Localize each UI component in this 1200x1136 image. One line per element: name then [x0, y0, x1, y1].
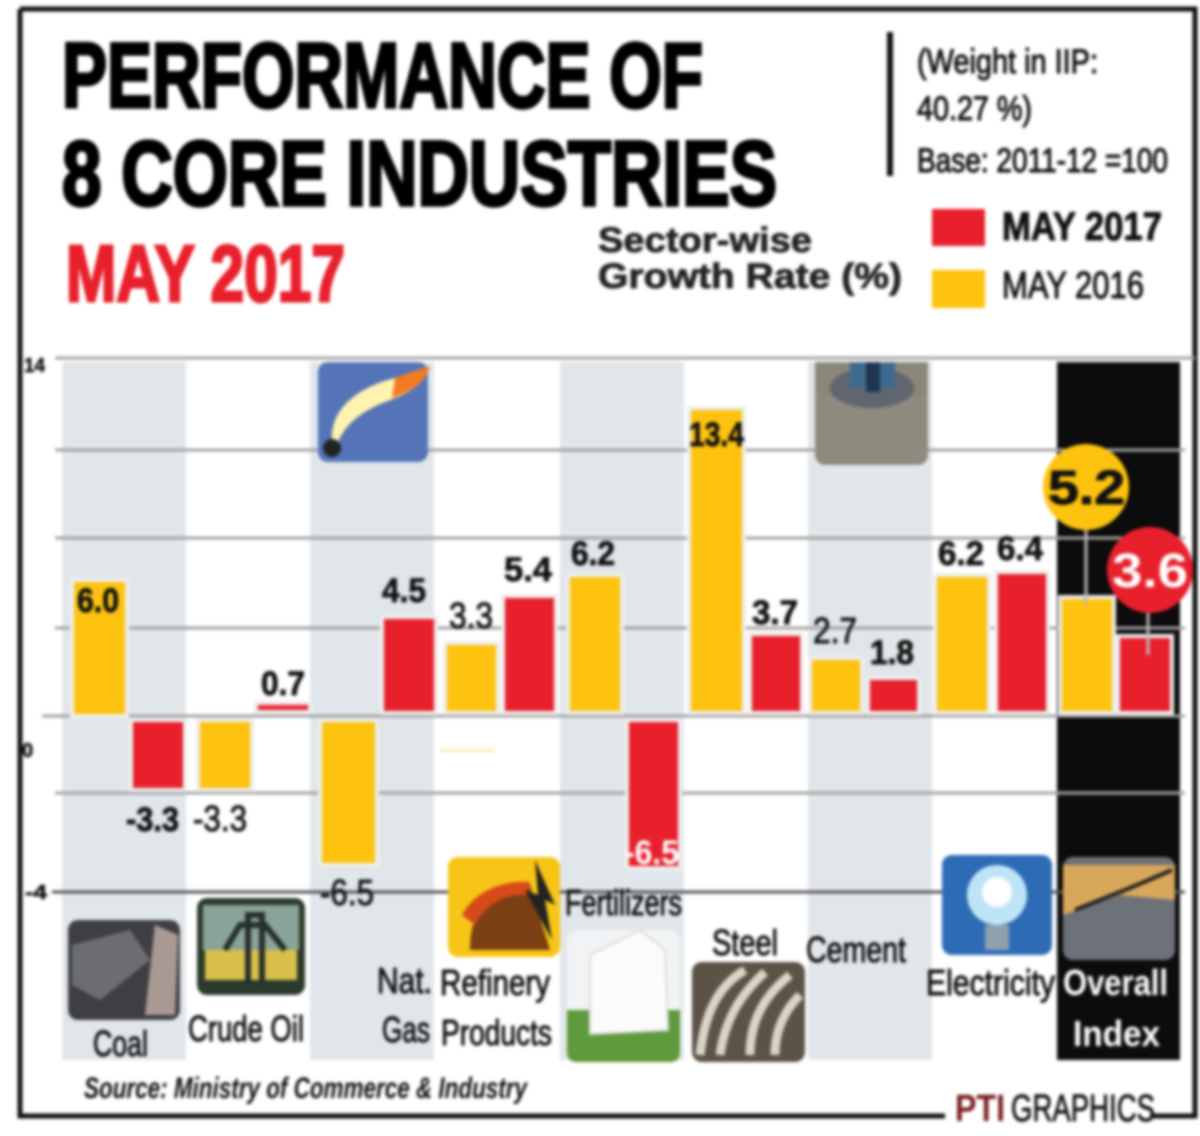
legend: MAY 2017 [1002, 205, 1162, 249]
bars: natural gas: -6.5 [320, 872, 374, 913]
bars: coal: -3.3 [126, 801, 179, 839]
bars: coal: 6.0 [77, 582, 119, 620]
icon: crude oil [197, 898, 305, 995]
chart subtitle: Sector-wise [598, 221, 812, 260]
date subtitle: MAY 2017 [66, 229, 345, 318]
bars: electricity: 6.4 [997, 530, 1043, 568]
bars: fertilizers [568, 535, 680, 872]
bars: overall index [1060, 530, 1172, 713]
category labels: Index [1073, 1013, 1160, 1054]
source note: Source: Ministry of Commerce & Industry [84, 1072, 528, 1105]
category labels: Electricity [926, 962, 1055, 1003]
category labels: Nat. [377, 960, 432, 1001]
bars: electricity: 6.2 [938, 535, 984, 573]
icon: gas flare [318, 362, 430, 462]
bars: coal [72, 580, 185, 839]
weight and base note: (Weight in IIP: [917, 43, 1098, 81]
column bands [62, 362, 1180, 1060]
chart subtitle: Growth Rate (%) [598, 257, 902, 296]
weight and base note: 40.27 %) [917, 90, 1032, 128]
title: PERFORMANCE OF [62, 25, 703, 127]
bars: cement: 2.7 [813, 610, 857, 651]
callout: overall 3.6: 3.6 [1112, 545, 1188, 598]
category labels: Coal [93, 1023, 148, 1064]
icon: cement [815, 362, 928, 465]
icon: coal [68, 920, 180, 1020]
weight and base note [887, 32, 1168, 180]
chart subtitle [598, 221, 902, 296]
legend: MAY 2016 [1002, 265, 1144, 307]
bars: cement [810, 610, 919, 713]
bars: steel [689, 408, 802, 713]
icon: overall index [1063, 857, 1175, 960]
icon: fertilizer bag [567, 930, 680, 1062]
bars: crude oil [193, 665, 310, 839]
category labels: Overall [1063, 962, 1168, 1003]
bars: natural gas: 4.5 [382, 572, 426, 610]
title [62, 25, 777, 225]
credit [955, 1088, 1155, 1130]
bars: fertilizers: -6.5 [624, 834, 679, 872]
bars: refinery products: 5.4 [504, 551, 552, 589]
bars: natural gas [320, 572, 436, 913]
axis labels: 0 [22, 740, 33, 762]
callout: overall 5.2: 5.2 [1048, 462, 1125, 515]
category labels: Products [441, 1012, 552, 1053]
axis labels: 14 [24, 355, 46, 377]
callout: overall 5.2 [1043, 444, 1129, 530]
icon: electricity bulb [942, 855, 1052, 955]
bars: crude oil: 0.7 [261, 665, 305, 703]
bars: steel: 13.4 [689, 416, 744, 454]
category labels: Fertilizers [565, 882, 682, 923]
category labels: Cement [806, 929, 906, 970]
category labels: Crude Oil [188, 1008, 304, 1049]
bars: refinery products: 3.3 [449, 595, 493, 636]
bars: refinery products [440, 551, 556, 752]
legend [932, 205, 1162, 308]
credit: PTI [955, 1088, 1005, 1130]
category labels: Refinery [440, 962, 550, 1003]
icon: refinery products [448, 857, 560, 957]
category labels: Steel [712, 922, 778, 963]
category labels [93, 882, 1168, 1064]
bars: steel: 3.7 [752, 594, 798, 632]
grid lines and axis [42, 358, 1195, 892]
callout: overall 3.6 [1107, 527, 1193, 613]
bars: electricity [935, 530, 1048, 713]
bars: crude oil: -3.3 [193, 798, 247, 839]
bars: cement: 1.8 [870, 634, 914, 672]
title: 8 CORE INDUSTRIES [62, 123, 777, 225]
axis labels: -4 [25, 882, 48, 904]
category labels: Gas [382, 1009, 430, 1050]
axis labels [22, 355, 48, 904]
bars: fertilizers: 6.2 [571, 535, 615, 573]
icon: steel [692, 962, 805, 1062]
